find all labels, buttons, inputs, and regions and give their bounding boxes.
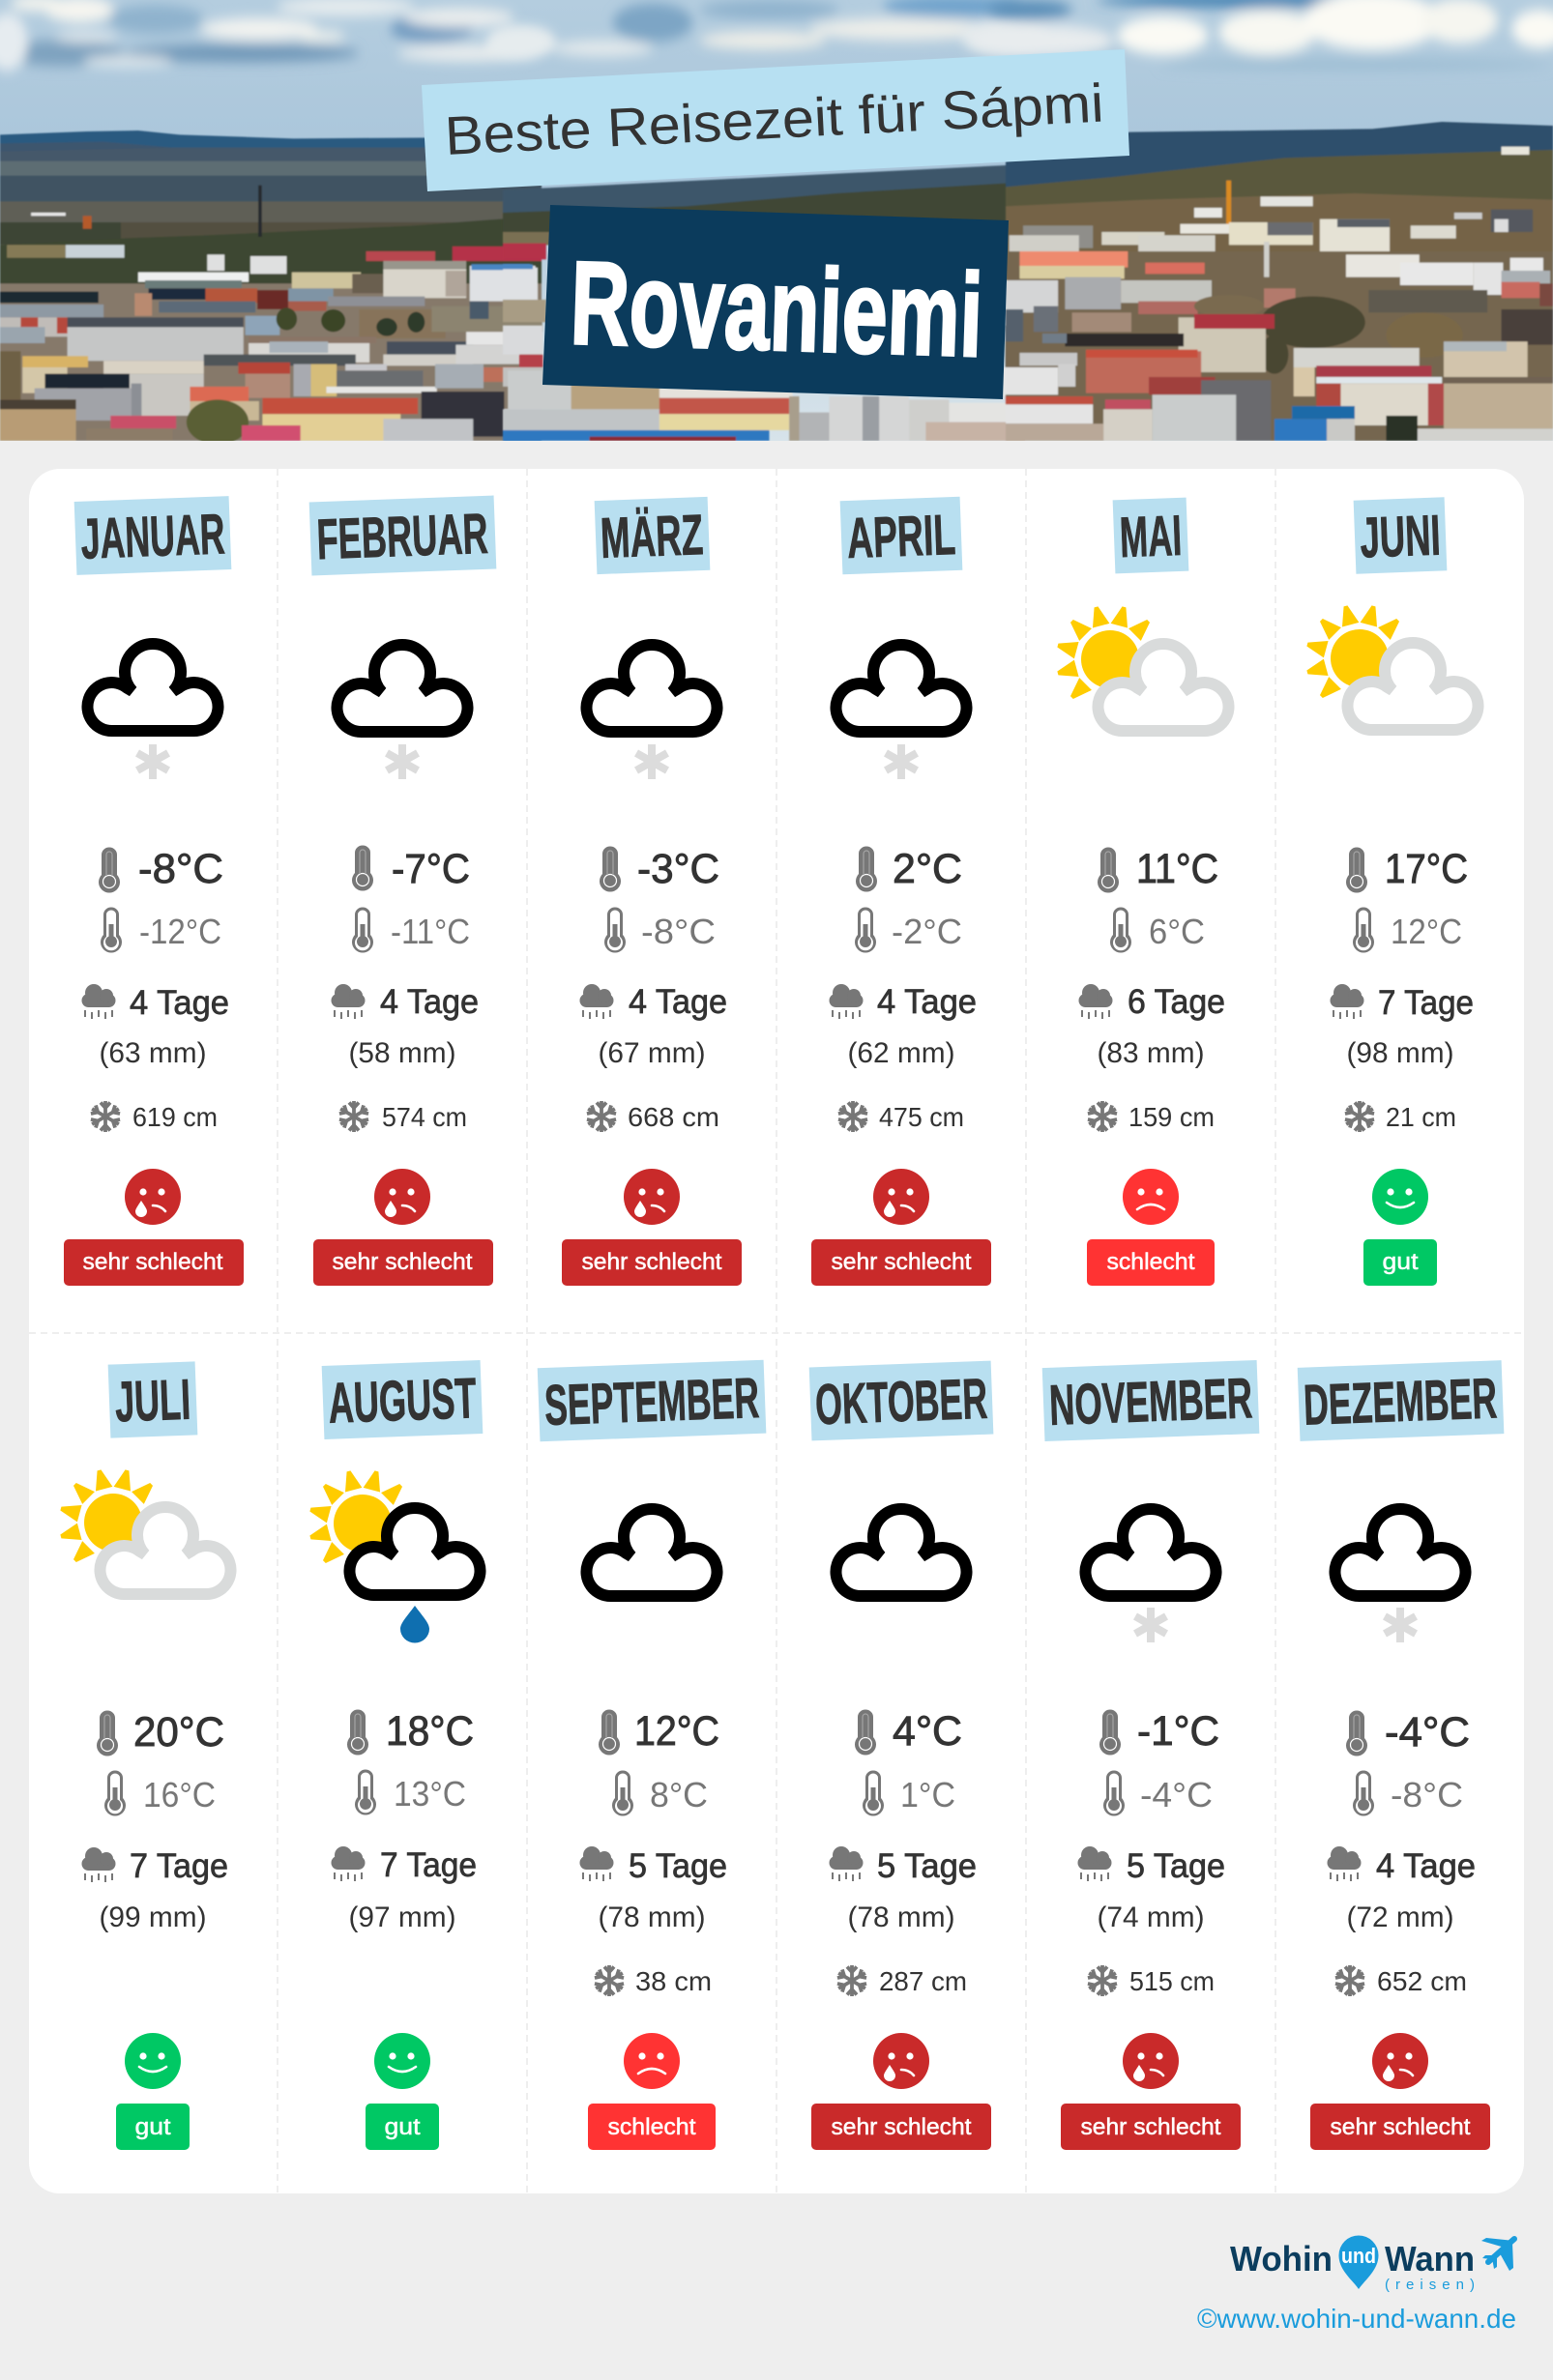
low temperature: -8°C — [641, 912, 716, 951]
high temperature — [1099, 1708, 1219, 1756]
panel: Oktober — [809, 1361, 993, 2150]
month label: März — [595, 497, 710, 574]
panel: März — [562, 497, 742, 1286]
high temperature: 11°C — [1136, 846, 1218, 892]
month label: Februar — [309, 496, 496, 575]
low temperature — [1353, 1771, 1463, 1816]
rating badge: sehr schlecht: sehr schlecht — [582, 1249, 722, 1275]
logo: Wohin und Wann reisen: (reisen) — [1385, 2277, 1475, 2293]
weather icon: cloud — [835, 1509, 967, 1596]
logo: Wohin und Wann reisen: Wann — [1385, 2239, 1475, 2278]
rain days: 4 Tage — [629, 983, 727, 1021]
snow depth: 668 cm — [628, 1102, 719, 1132]
precipitation: (62 mm) — [847, 1037, 955, 1069]
snow depth: 619 cm — [132, 1102, 218, 1132]
high temperature: -7°C — [392, 846, 470, 892]
rating icon — [1372, 1169, 1428, 1225]
rating badge: gut: gut — [385, 2114, 421, 2140]
panel: April — [811, 497, 991, 1286]
rain days: 5 Tage — [629, 1847, 727, 1885]
low temperature: 13°C — [394, 1774, 466, 1814]
month label: Mai: MAI — [1119, 504, 1183, 569]
weather icon: cloud with snow — [87, 644, 219, 779]
rain days — [1327, 1846, 1476, 1885]
high temperature — [855, 1708, 962, 1756]
month label: September — [538, 1360, 766, 1441]
rating icon — [624, 2033, 680, 2089]
month label: Juni — [1354, 497, 1447, 574]
low temperature — [612, 1771, 708, 1816]
precipitation: (98 mm) — [1346, 1037, 1454, 1069]
low temperature: -8°C — [1391, 1775, 1463, 1814]
rating icon — [374, 1169, 430, 1225]
low temperature — [604, 907, 716, 953]
rain days: 5 Tage — [1127, 1847, 1225, 1885]
panel: climate calendar card — [29, 469, 1524, 2193]
snow depth: 574 cm — [382, 1102, 467, 1132]
precipitation: (97 mm) — [348, 1901, 456, 1933]
low temperature: 6°C — [1149, 912, 1205, 951]
rating icon — [1123, 2033, 1179, 2089]
high temperature — [1346, 846, 1468, 893]
rating badge: sehr schlecht: sehr schlecht — [83, 1249, 223, 1275]
snow depth — [837, 1101, 964, 1132]
weather icon: cloud with snow — [337, 645, 468, 779]
snow depth — [90, 1101, 218, 1132]
rating badge: gut — [366, 2104, 439, 2150]
rating badge: sehr schlecht — [1061, 2104, 1241, 2150]
weather icon: cloud with snow — [586, 645, 718, 779]
low temperature — [1103, 1771, 1213, 1816]
rating badge: sehr schlecht — [1310, 2104, 1490, 2150]
rain days: 7 Tage — [130, 1847, 228, 1885]
weather icon: sun, black cloud and rain drop — [308, 1469, 481, 1643]
precipitation: (83 mm) — [1097, 1037, 1205, 1069]
rating badge: sehr schlecht: sehr schlecht — [333, 1249, 473, 1275]
low temperature: -2°C — [892, 912, 962, 951]
right part of photo — [967, 0, 1553, 441]
low temperature — [863, 1771, 955, 1816]
panel: November — [1042, 1360, 1259, 2150]
icon: airplane — [1481, 2238, 1514, 2271]
rating badge: sehr schlecht: sehr schlecht — [1081, 2114, 1221, 2140]
low temperature — [855, 907, 962, 953]
low temperature — [101, 907, 221, 953]
rain days: 4 Tage — [877, 983, 977, 1021]
rating badge: sehr schlecht — [64, 1239, 244, 1286]
high temperature: 12°C — [634, 1708, 719, 1755]
high temperature — [599, 1708, 719, 1756]
low temperature: 1°C — [900, 1775, 955, 1814]
low temperature: -12°C — [139, 912, 221, 951]
rating badge: schlecht: schlecht — [1106, 1249, 1195, 1275]
snow depth: 287 cm — [879, 1966, 967, 1996]
month label: Juni: JUNI — [1359, 504, 1442, 569]
weather icon: cloud with snow — [1334, 1509, 1466, 1642]
precipitation: (67 mm) — [598, 1037, 706, 1069]
rating badge: schlecht — [1087, 1239, 1215, 1286]
rating badge: sehr schlecht: sehr schlecht — [1331, 2114, 1471, 2140]
panel: August — [308, 1360, 483, 2150]
website credit: ©www.wohin-und-wann.de — [1197, 2304, 1516, 2334]
low temperature: 12°C — [1391, 912, 1462, 951]
rain days — [81, 984, 229, 1022]
snow depth: 38 cm — [635, 1966, 712, 1996]
rating icon — [624, 1169, 680, 1225]
icon: map pin: und — [1341, 2244, 1376, 2268]
snow depth — [1087, 1965, 1215, 1996]
rain days — [1331, 984, 1474, 1022]
icon: map pin — [1338, 2235, 1379, 2289]
precipitation: (74 mm) — [1097, 1901, 1205, 1933]
subtitle text: Beste Reisezeit für Sápmi — [443, 73, 1105, 166]
rain days: 6 Tage — [1128, 983, 1225, 1021]
high temperature — [1346, 1709, 1470, 1756]
rain days — [81, 1847, 228, 1885]
month label: November: NOVEMBER — [1048, 1366, 1253, 1437]
rating icon — [873, 2033, 929, 2089]
snow depth — [1334, 1965, 1467, 1996]
snow depth: 21 cm — [1386, 1102, 1456, 1132]
high temperature: 2°C — [893, 846, 962, 892]
rating badge: sehr schlecht — [562, 1239, 742, 1286]
subtitle banner — [422, 49, 1129, 191]
rain days: 4 Tage — [380, 983, 479, 1021]
low temperature — [104, 1771, 216, 1816]
month label: Januar — [74, 496, 231, 575]
low temperature: 8°C — [650, 1775, 708, 1814]
left part of photo — [0, 0, 549, 445]
month label: Januar: JANUAR — [79, 502, 226, 571]
logo: Wohin und Wann reisen: Wohin — [1230, 2239, 1333, 2278]
precipitation: (78 mm) — [598, 1901, 706, 1933]
rating badge: gut — [1363, 1239, 1437, 1286]
rating badge: sehr schlecht: sehr schlecht — [832, 1249, 972, 1275]
precipitation: (63 mm) — [99, 1037, 207, 1069]
high temperature: -4°C — [1385, 1709, 1470, 1756]
month label: September: SEPTEMBER — [543, 1366, 760, 1437]
panel: Januar — [64, 496, 244, 1286]
rating badge: sehr schlecht: sehr schlecht — [832, 2114, 972, 2140]
hero photo: Rovaniemi townscape — [0, 0, 1553, 445]
high temperature: 17°C — [1385, 846, 1468, 892]
weather icon: cloud with snow — [1085, 1509, 1216, 1642]
low temperature: -4°C — [1140, 1775, 1213, 1814]
high temperature: -3°C — [637, 846, 719, 892]
high temperature — [600, 846, 719, 892]
rating icon — [125, 1169, 181, 1225]
rain days — [1079, 983, 1225, 1021]
month label: August: AUGUST — [327, 1366, 478, 1436]
low temperature — [1110, 907, 1205, 953]
rating badge: sehr schlecht — [313, 1239, 493, 1286]
weather icon: sun and grey cloud — [59, 1468, 231, 1594]
snow depth — [1344, 1101, 1456, 1132]
high temperature — [352, 845, 470, 892]
rain days — [580, 983, 727, 1021]
high temperature: 4°C — [893, 1708, 962, 1755]
low temperature: 16°C — [143, 1775, 216, 1814]
title text: Rovaniemi — [569, 237, 984, 381]
high temperature — [99, 846, 223, 893]
month label: April — [840, 497, 962, 574]
panel: September — [538, 1360, 766, 2150]
low temperature — [355, 1769, 466, 1815]
rating badge: schlecht: schlecht — [607, 2114, 696, 2140]
rating badge: gut — [116, 2104, 190, 2150]
rating icon — [873, 1169, 929, 1225]
rain days: 5 Tage — [877, 1847, 977, 1885]
precipitation: (78 mm) — [847, 1901, 955, 1933]
rating badge: sehr schlecht — [811, 1239, 991, 1286]
month label: Juli: JULI — [114, 1368, 191, 1434]
rain days: 4 Tage — [130, 984, 229, 1022]
panel: Februar — [309, 496, 496, 1286]
month label: Oktober: OKTOBER — [814, 1367, 988, 1437]
rating badge: gut: gut — [1383, 1249, 1419, 1275]
high temperature — [1098, 846, 1218, 893]
rain days — [331, 1846, 477, 1884]
logo: Wohin und Wann reisen — [1230, 2235, 1514, 2293]
panel: Juni — [1305, 497, 1479, 1286]
snow depth — [586, 1101, 719, 1132]
panel: Mai — [1056, 498, 1229, 1286]
weather icon: sun and grey cloud — [1305, 604, 1479, 730]
precipitation: (99 mm) — [99, 1901, 207, 1933]
month label: März: MÄRZ — [600, 503, 704, 570]
weather icon: cloud — [586, 1509, 718, 1596]
snow depth — [836, 1965, 967, 1996]
month label: Juli — [108, 1361, 197, 1438]
rating badge: gut: gut — [135, 2114, 171, 2140]
rating icon — [1372, 2033, 1428, 2089]
snow depth: 159 cm — [1128, 1102, 1215, 1132]
high temperature: 20°C — [133, 1709, 224, 1756]
rain days — [580, 1846, 727, 1885]
snow depth: 475 cm — [879, 1102, 964, 1132]
panel: Dezember — [1298, 1360, 1504, 2150]
rating badge: sehr schlecht — [811, 2104, 991, 2150]
low temperature — [352, 907, 470, 953]
precipitation: (58 mm) — [348, 1037, 456, 1069]
snow depth: 515 cm — [1129, 1966, 1215, 1996]
high temperature — [347, 1708, 474, 1756]
month label: August — [322, 1360, 483, 1439]
panel: Juli — [59, 1361, 231, 2150]
rating icon — [1123, 1169, 1179, 1225]
rain days — [830, 1846, 977, 1885]
snow depth — [1087, 1101, 1215, 1132]
rain days: 7 Tage — [1378, 984, 1474, 1022]
weather icon: cloud with snow — [835, 645, 967, 779]
rain days — [1077, 1846, 1225, 1885]
high temperature: 18°C — [386, 1708, 474, 1755]
rating icon — [374, 2033, 430, 2089]
rain days: 4 Tage — [1376, 1847, 1476, 1885]
low temperature — [1353, 907, 1462, 953]
low temperature: -11°C — [391, 912, 470, 951]
rating icon — [125, 2033, 181, 2089]
weather icon: sun and grey cloud — [1056, 605, 1229, 731]
month label: Oktober — [809, 1361, 993, 1440]
high temperature — [97, 1709, 224, 1756]
high temperature: -1°C — [1137, 1708, 1219, 1755]
month label: November — [1042, 1360, 1259, 1441]
rain days — [830, 983, 977, 1021]
month label: Februar: FEBRUAR — [315, 502, 489, 571]
rating badge: schlecht — [588, 2104, 716, 2150]
month label: Mai — [1113, 498, 1188, 573]
title banner — [542, 205, 1009, 399]
snow depth — [594, 1965, 712, 1996]
high temperature — [856, 846, 962, 892]
high temperature: -8°C — [138, 846, 223, 892]
rain days — [331, 983, 479, 1021]
snow depth — [338, 1101, 467, 1132]
middle part of photo — [489, 0, 1045, 441]
month label: April: APRIL — [846, 503, 956, 570]
precipitation: (72 mm) — [1346, 1901, 1454, 1933]
snow depth: 652 cm — [1377, 1966, 1467, 1996]
rain days: 7 Tage — [380, 1846, 477, 1884]
